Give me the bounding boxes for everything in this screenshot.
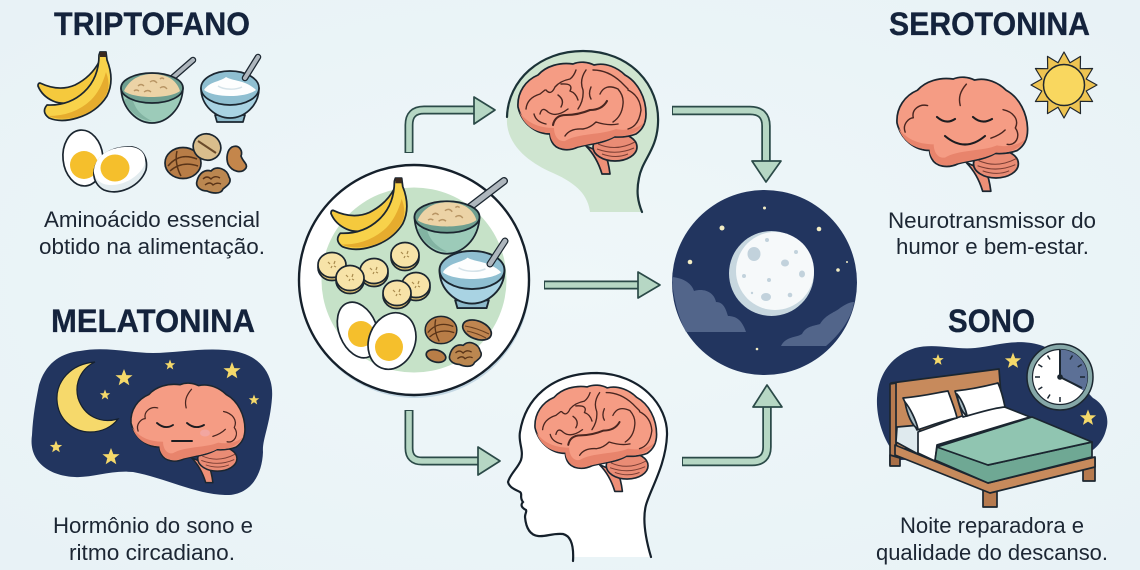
pillows [903, 391, 957, 430]
icon: boiled eggs [330, 296, 424, 377]
icon: smiling brain [897, 77, 1028, 191]
icon: wall clock [1027, 344, 1093, 410]
panel: central plate of food [299, 165, 530, 398]
text: serotonina description: Neurotransmissor do [888, 208, 1096, 233]
icon: sun [1031, 52, 1097, 118]
icon: bananas [331, 178, 407, 249]
arrow: plate to moon [544, 272, 660, 298]
full moon [729, 231, 814, 316]
arrow: plate to lower head [409, 410, 500, 475]
panel: sono [876, 303, 1108, 565]
panel: melatonina [32, 303, 272, 565]
text: triptofano description: Aminoácido essencial [44, 207, 260, 232]
icon: bed [890, 369, 1095, 507]
illustration: head with brain, upper [507, 51, 658, 212]
heading: sono: SONO [948, 303, 1035, 339]
icon: nuts [425, 316, 494, 366]
text: melatonina description: Hormônio do sono e [53, 513, 253, 538]
arrow: upper brain to moon [672, 110, 781, 182]
icon: crescent moon [57, 362, 118, 432]
stars [50, 360, 259, 464]
text: melatonina description: ritmo circadiano. [69, 540, 235, 565]
green duvet top [937, 417, 1092, 465]
icon: oat bowl with spoon [414, 181, 504, 254]
night sky blob [877, 342, 1107, 460]
icon: mixed nuts [165, 129, 246, 193]
plate [299, 165, 530, 398]
stars [688, 206, 848, 350]
panel: serotonina [888, 6, 1097, 259]
text: serotonina description [888, 208, 1096, 259]
illustration: moon at night [672, 190, 857, 375]
illustration: head profile with brain, lower [508, 373, 667, 561]
icon: banana slices [318, 242, 430, 308]
text: melatonina description [53, 513, 253, 565]
stars [932, 352, 1096, 425]
night sky blob [32, 349, 272, 495]
headboard [891, 369, 1002, 452]
icon: sleeping brain [131, 383, 245, 483]
heading: serotonina: SEROTONINA [889, 6, 1090, 42]
green duvet side [935, 442, 1092, 483]
text: sono description: qualidade do descanso. [876, 540, 1108, 565]
white sheet [918, 406, 1030, 461]
icon: bananas [38, 52, 111, 120]
frame [895, 445, 1095, 493]
heading: melatonina: MELATONINA [51, 303, 255, 339]
heading: triptofano: TRIPTOFANO [54, 6, 250, 42]
arrow: plate to upper brain [409, 97, 495, 153]
icon: yogurt bowl with spoon [440, 241, 505, 308]
arrow: lower head to moon [682, 385, 782, 462]
legs [890, 455, 900, 466]
icon: boiled eggs [60, 128, 146, 192]
clouds [672, 277, 746, 332]
text: triptofano description: obtido na alimentação. [39, 234, 265, 259]
text: serotonina description: humor e bem-estar. [896, 234, 1089, 259]
icon: oat bowl with spoon [121, 60, 193, 123]
panel: triptofano [38, 6, 265, 259]
text: sono description: Noite reparadora e [900, 513, 1084, 538]
night sky disc [672, 190, 857, 375]
text: triptofano description [39, 207, 265, 259]
mattress [896, 425, 920, 454]
icon: yogurt bowl with spoon [201, 57, 259, 122]
text: sono description [876, 513, 1108, 565]
